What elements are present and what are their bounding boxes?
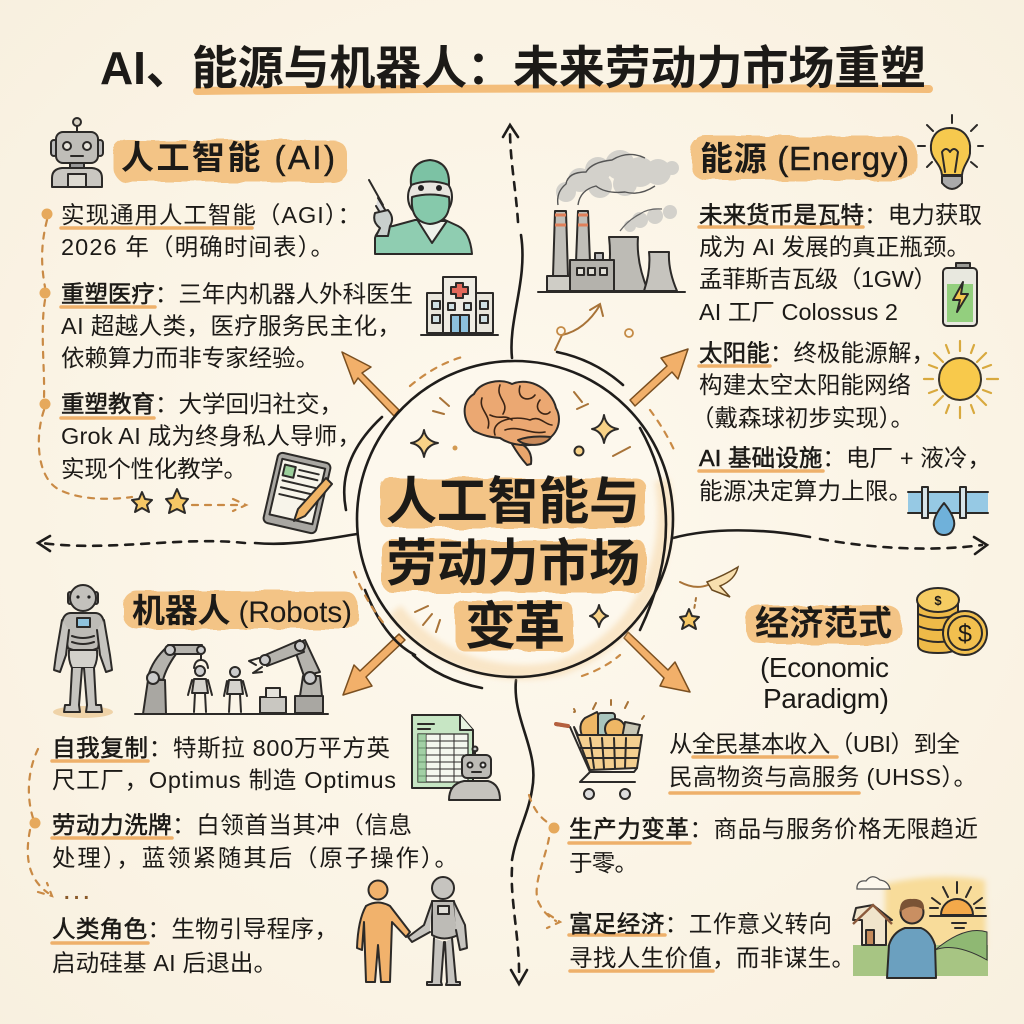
text: self replication: 自我复制：特斯拉 800万平方英 <box>52 735 390 761</box>
text: UBI to UHSS: 从全民基本收入（UBI）到全 <box>669 731 960 757</box>
icon: brain <box>465 381 559 465</box>
text: watts <box>699 202 982 260</box>
text: infrastructure <box>699 445 991 504</box>
heading: Economic: (Economic <box>760 652 889 683</box>
heading: Economic: 经济范式 <box>755 605 892 643</box>
text: labor shuffle: 劳动力洗牌：白领首当其冲（信息 <box>52 812 412 838</box>
text: productivity: 于零。 <box>569 850 638 876</box>
orange arrows from centre <box>342 349 690 695</box>
text: solar: 构建太空太阳能网络 <box>699 372 911 398</box>
icon: coins <box>917 588 987 655</box>
icon: human and robot handshake <box>357 877 467 985</box>
text: healthcare: AI 超越人类，医疗服务民主化， <box>61 313 401 339</box>
text: education <box>61 391 361 482</box>
text: labor shuffle <box>52 812 458 871</box>
panel: Robots <box>28 585 500 985</box>
icon: coins: $ <box>958 620 972 648</box>
decorative ticks in circle <box>415 392 630 632</box>
text: AGI <box>61 202 361 260</box>
icon: factory <box>538 150 685 292</box>
heading: Energy: 能源 (Energy) <box>700 140 909 177</box>
central heading: 变革 <box>465 598 565 655</box>
central heading: 劳动力市场 <box>386 535 640 592</box>
icon: hospital <box>421 277 498 335</box>
text: Colossus: AI 工厂 Colossus 2 <box>699 299 898 325</box>
heading: Economic: Paradigm) <box>763 683 889 714</box>
decorative small arrow <box>555 304 633 350</box>
text: healthcare: 依赖算力而非专家经验。 <box>61 345 319 371</box>
text: AGI: 2026 年（明确时间表）。 <box>61 234 334 260</box>
icon: tablet with pencil <box>263 452 332 534</box>
icon: coins: $ <box>934 593 942 608</box>
panel: Economic paradigm <box>529 567 988 978</box>
heading: Economic <box>746 605 902 714</box>
icon: battery <box>943 263 977 326</box>
panel: Energy <box>538 115 998 535</box>
text: human role: 启动硅基 AI 后退出。 <box>52 950 277 976</box>
icon: shopping cart <box>556 700 644 799</box>
dashed flow: ... <box>64 882 89 904</box>
text: watts: 未来货币是瓦特：电力获取 <box>699 202 982 228</box>
icon: pipe with water drop <box>908 487 988 535</box>
text: abundance: 寻找人生价值，而非谋生。 <box>569 945 855 971</box>
text: human role: 人类角色：生物引导程序， <box>52 916 338 942</box>
text: UBI to UHSS <box>669 731 977 793</box>
icon: stars <box>132 489 188 513</box>
central circle <box>344 352 675 688</box>
title: AI、能源与机器人：未来劳动力市场重塑 <box>100 42 926 94</box>
text: self replication: 尺工厂，Optimus 制造 Optimus <box>52 767 396 793</box>
icon: light bulb <box>918 115 983 189</box>
text: healthcare <box>61 281 413 371</box>
text: infrastructure: AI 基础设施：电厂 + 液冷， <box>699 445 991 471</box>
text: solar: 太阳能：终极能源解， <box>699 340 935 366</box>
text: AGI: 实现通用人工智能（AGI）： <box>61 202 361 228</box>
text: education: 重塑教育：大学回归社交， <box>61 391 343 417</box>
text: education: Grok AI 成为终身私人导师， <box>61 423 361 449</box>
text: abundance: 富足经济：工作意义转向 <box>569 911 832 937</box>
text: human role <box>52 916 338 976</box>
text: watts: 成为 AI 发展的真正瓶颈。 <box>699 234 970 260</box>
central heading: 人工智能与 <box>386 473 640 530</box>
text: infrastructure: 能源决定算力上限。 <box>699 478 912 504</box>
text: Colossus <box>699 266 937 325</box>
text: Colossus: 孟菲斯吉瓦级（1GW） <box>699 266 937 292</box>
heading: AI: 人工智能 (AI) <box>121 139 335 176</box>
decorative paper plane and star <box>680 567 738 629</box>
text: productivity <box>569 816 978 876</box>
icon: sun <box>924 341 998 418</box>
icon: sunset scene with person <box>853 877 988 978</box>
icon: spreadsheet with robot <box>412 715 500 800</box>
icon: robot arms assembly <box>135 640 328 714</box>
text: solar <box>691 340 935 431</box>
icon: robot surgeon <box>369 160 472 254</box>
connector: curved line down <box>511 680 533 984</box>
text: UBI to UHSS: 民高物资与高服务 (UHSS）。 <box>669 764 977 790</box>
heading: Robots: 机器人 (Robots) <box>132 592 352 629</box>
dashed flow <box>529 795 560 928</box>
central heading <box>380 473 646 655</box>
icon: robot head <box>51 118 103 187</box>
connector: curved line right <box>673 530 987 554</box>
text: healthcare: 重塑医疗：三年内机器人外科医生 <box>61 281 413 307</box>
text: self replication <box>52 735 396 793</box>
icon: sparkles <box>411 415 618 627</box>
text: education: 实现个性化教学。 <box>61 456 247 482</box>
text: abundance <box>569 911 855 971</box>
connector: curved line up <box>503 125 522 358</box>
text: productivity: 生产力变革：商品与服务价格无限趋近 <box>569 816 978 842</box>
text: labor shuffle: 处理），蓝领紧随其后（原子操作）。 <box>52 845 458 871</box>
dashed flow <box>28 749 89 904</box>
panel: AI <box>39 118 498 534</box>
text: solar: （戴森球初步实现）。 <box>691 405 914 431</box>
icon: humanoid robot <box>53 585 113 718</box>
connector: curved line left <box>38 534 357 551</box>
dashed flow with dots <box>39 208 246 511</box>
